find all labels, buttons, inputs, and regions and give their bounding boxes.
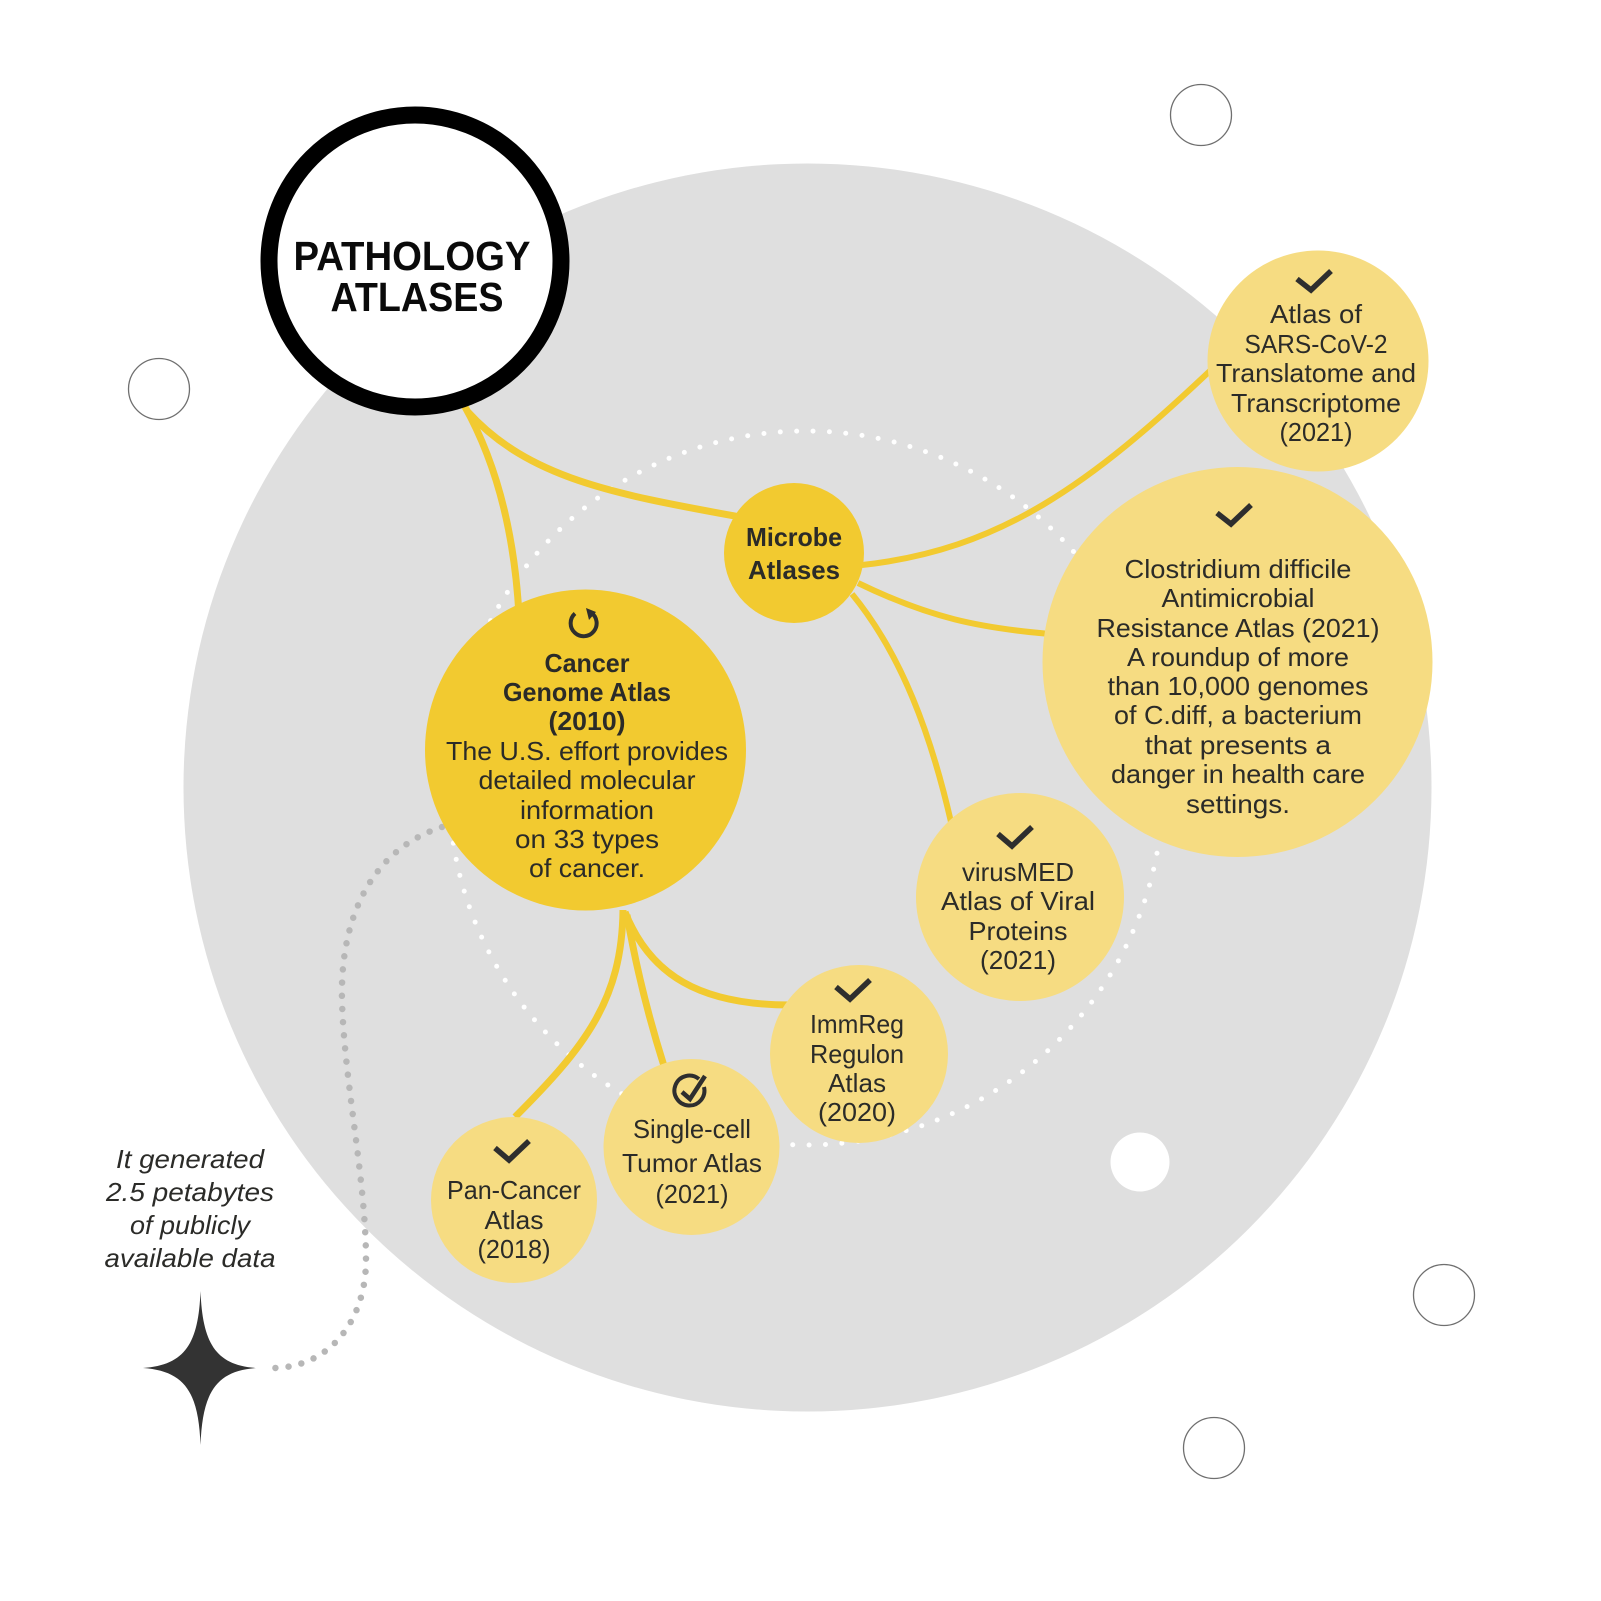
node: Clostridium difficile Antimicrobial Resistance Atlas: A roundup of more [1127, 642, 1349, 672]
node: Clostridium difficile Antimicrobial Resistance Atlas: Antimicrobial [1162, 583, 1314, 613]
node: Cancer Genome Atlas: information [520, 795, 654, 825]
node: Atlas of SARS-CoV-2: Translatome and [1216, 358, 1416, 388]
node: Microbe Atlases: Atlases [748, 555, 840, 585]
node: Microbe Atlases: Microbe [746, 522, 842, 552]
node: virusMED Atlas of Viral Proteins: Atlas of Viral [941, 886, 1095, 916]
callout note: 2.5 petabytes: 2.5 petabytes [105, 1177, 274, 1207]
node: Cancer Genome Atlas: The U.S. effort provides [446, 736, 728, 766]
node: Cancer Genome Atlas: of cancer. [529, 853, 645, 883]
icon: check [998, 827, 1032, 846]
node: Atlas of SARS-CoV-2: SARS-CoV-2 [1244, 329, 1388, 359]
node: Clostridium difficile Antimicrobial Resistance Atlas: of C.diff, a bacterium [1114, 700, 1362, 730]
connector lines [464, 367, 1214, 1117]
node: Single-cell Tumor Atlas: (2021) [656, 1179, 728, 1209]
node: Cancer Genome Atlas: Genome Atlas [503, 677, 671, 707]
icon: refresh arrow [571, 608, 597, 636]
callout note: 2.5 petabytes [104, 1144, 276, 1273]
decorative outlined circle left [128, 358, 190, 420]
node: Atlas of SARS-CoV-2: Atlas of [1270, 299, 1363, 329]
title circle: Pathology Atlases: PATHOLOGY [294, 233, 530, 279]
node: ImmReg Regulon Atlas: Regulon [810, 1039, 904, 1069]
decorative outlined circle top right [1170, 84, 1232, 146]
node: Cancer Genome Atlas: on 33 types [515, 824, 659, 854]
node: ImmReg Regulon Atlas: Atlas [828, 1068, 886, 1098]
node: Single-cell Tumor Atlas: Single-cell [633, 1114, 751, 1144]
node: Atlas of SARS-CoV-2: Transcriptome [1231, 388, 1401, 418]
icon: check [1217, 505, 1251, 524]
node: ImmReg Regulon Atlas: (2020) [818, 1097, 896, 1127]
icon: check [836, 980, 870, 999]
dotted gray connector from Cancer Genome Atlas to star [272, 827, 442, 1368]
node: Clostridium difficile Antimicrobial Resistance Atlas [1042, 467, 1432, 857]
node: Pan-Cancer Atlas: Pan-Cancer [447, 1175, 581, 1205]
node: Cancer Genome Atlas: Cancer [544, 648, 630, 678]
decorative outlined circle lower right [1414, 1264, 1474, 1326]
icon: four-point star [143, 1291, 256, 1445]
callout note: 2.5 petabytes: It generated [116, 1144, 266, 1174]
background: large gray circle [184, 164, 1432, 1412]
node: virusMED Atlas of Viral Proteins: (2021) [980, 945, 1056, 975]
node: Pan-Cancer Atlas: Atlas [484, 1205, 544, 1235]
node: virusMED Atlas of Viral Proteins [916, 793, 1124, 1001]
node: virusMED Atlas of Viral Proteins: Proteins [968, 916, 1068, 946]
title circle: Pathology Atlases: ATLASES [330, 274, 504, 320]
node: Clostridium difficile Antimicrobial Resistance Atlas: Clostridium difficile [1124, 554, 1352, 584]
node: Clostridium difficile Antimicrobial Resistance Atlas: that presents a [1145, 730, 1332, 760]
node: Clostridium difficile Antimicrobial Resistance Atlas: danger in health care [1111, 759, 1365, 789]
title circle: Pathology Atlases [269, 115, 561, 407]
node: Single-cell Tumor Atlas [604, 1059, 780, 1235]
callout note: 2.5 petabytes: available data [104, 1243, 276, 1273]
node: ImmReg Regulon Atlas: ImmReg [810, 1009, 904, 1039]
node: Pan-Cancer Atlas: (2018) [478, 1234, 550, 1264]
decorative white circle [1110, 1132, 1170, 1192]
node: Microbe Atlases [724, 483, 864, 623]
icon: circled check [674, 1076, 705, 1106]
icon: check [495, 1141, 529, 1160]
node: Atlas of SARS-CoV-2: (2021) [1280, 417, 1352, 447]
node: Clostridium difficile Antimicrobial Resistance Atlas: Resistance Atlas (2021) [1096, 613, 1380, 643]
decorative outlined circle bottom [1184, 1418, 1244, 1478]
callout note: 2.5 petabytes: of publicly [130, 1210, 252, 1240]
node: virusMED Atlas of Viral Proteins: virusMED [962, 857, 1074, 887]
node: Cancer Genome Atlas: (2010) [548, 706, 626, 736]
node: Clostridium difficile Antimicrobial Resistance Atlas: settings. [1186, 789, 1290, 819]
icon: check [1297, 271, 1331, 290]
node: Pan-Cancer Atlas [431, 1117, 597, 1283]
node: ImmReg Regulon Atlas [770, 965, 948, 1143]
node: Atlas of SARS-CoV-2 [1208, 250, 1428, 472]
node: Single-cell Tumor Atlas: Tumor Atlas [622, 1148, 762, 1178]
node: Cancer Genome Atlas: detailed molecular [478, 765, 696, 795]
node: Cancer Genome Atlas [425, 590, 746, 910]
node: Clostridium difficile Antimicrobial Resistance Atlas: than 10,000 genomes [1108, 671, 1368, 701]
